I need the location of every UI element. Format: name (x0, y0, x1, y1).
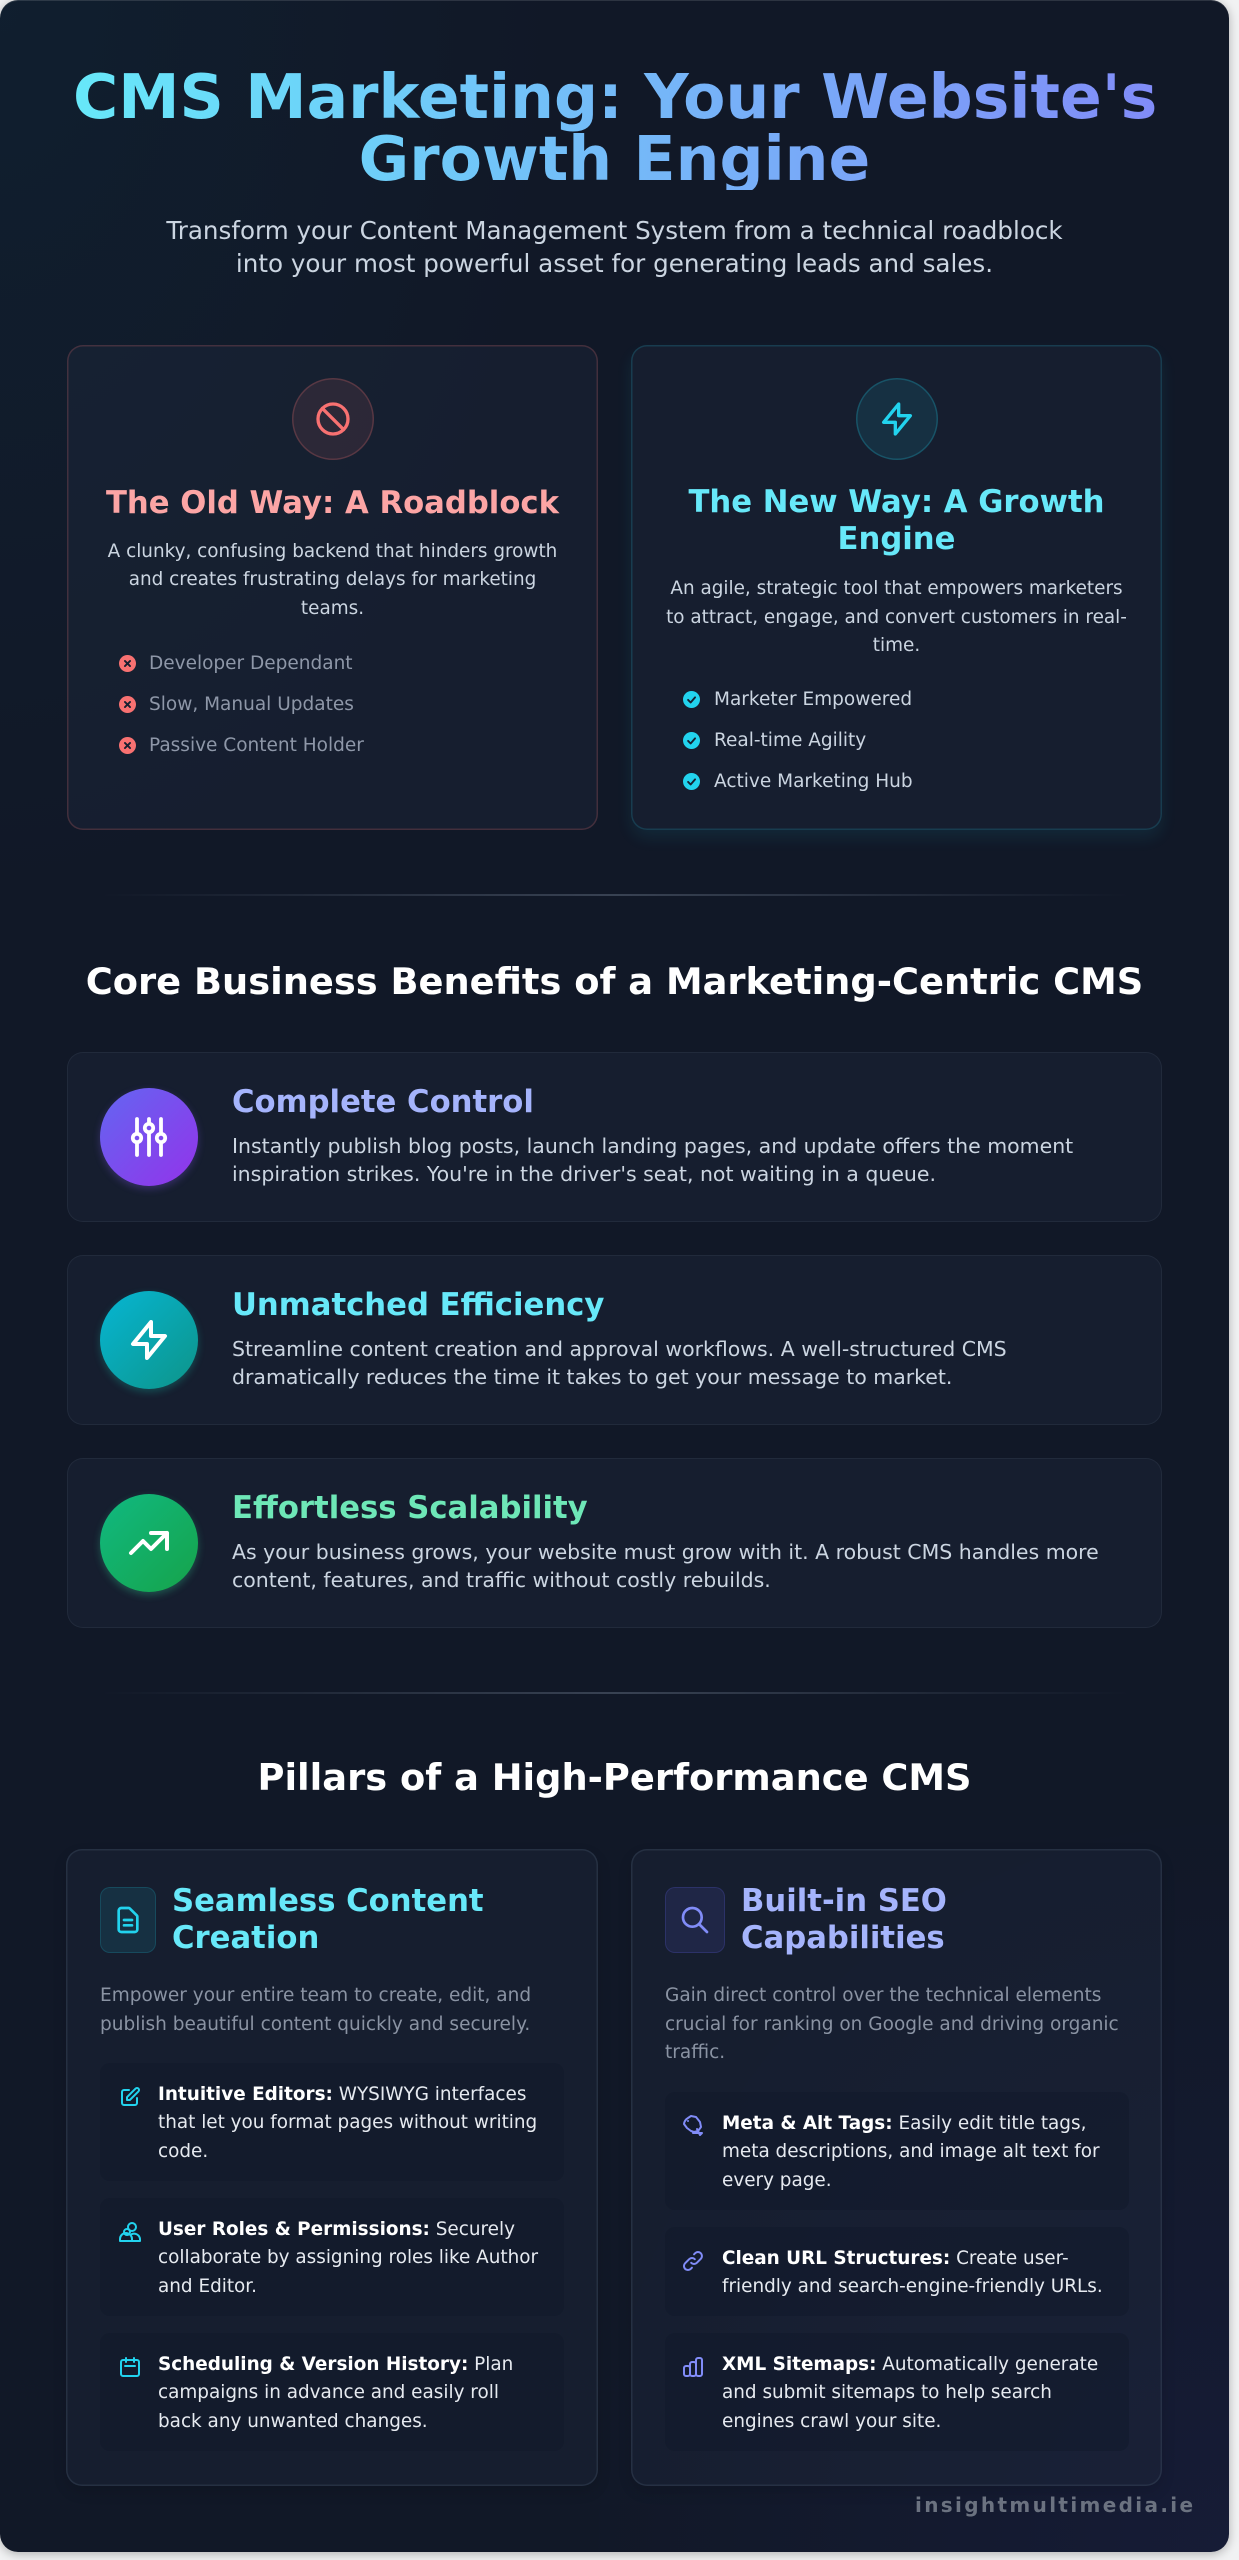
icon: link (683, 2251, 703, 2271)
list item: Slow, Manual Updates (149, 694, 354, 715)
heading: seamless content creation (172, 1884, 484, 1956)
text: effortless scalability: As your business grows, your website must grow with it. A robust CMS handles more (232, 1540, 1099, 1564)
text: seamless description: publish beautiful content quickly and securely. (100, 2014, 530, 2035)
feature: xml sitemaps (665, 2333, 1129, 2451)
heading: built-in seo (741, 1884, 947, 1956)
text: old way description: A clunky, confusing backend that hinders growth (108, 540, 557, 562)
title: CMS Marketing: Your Website's (73, 60, 1157, 132)
feature: scheduling (100, 2333, 564, 2451)
icon: x mark (119, 696, 136, 713)
title: Growth Engine (359, 122, 870, 194)
text: meta and alt tags: every page. (722, 2170, 832, 2191)
panel: the old way (67, 345, 598, 830)
heading: unmatched efficiency: Unmatched Efficiency (232, 1288, 604, 1322)
text: old way description: teams. (301, 598, 364, 619)
panel: unmatched efficiency (67, 1255, 1162, 1425)
list item: Real-time Agility (714, 730, 866, 751)
text: new way description (666, 578, 1127, 656)
text: clean urls (722, 2248, 1103, 2297)
text: unmatched efficiency: dramatically reduces the time it takes to get your message to market. (232, 1365, 952, 1389)
text: new way description: to attract, engage, and convert customers in real- (666, 607, 1127, 628)
text: xml sitemaps: XML Sitemaps: Automatically generate (722, 2354, 1098, 2374)
icon: check mark (683, 691, 700, 708)
text: new way description: time. (873, 635, 920, 656)
text: scheduling: Scheduling & Version History: Plan (158, 2354, 513, 2374)
panel: the new way (631, 345, 1162, 830)
list item: Active Marketing Hub (714, 771, 913, 792)
text: seo description: Gain direct control over the technical elements (665, 1985, 1101, 2006)
text: meta and alt tags: meta descriptions, and image alt text for (722, 2141, 1100, 2162)
text: unmatched efficiency: Streamline content creation and approval workflows. A well-structured CMS (232, 1336, 1007, 1360)
icon: prohibited (292, 378, 374, 460)
icon: bolt (100, 1291, 198, 1389)
text: user roles: collaborate by assigning roles like Author (158, 2247, 538, 2268)
heading: built-in seo: Capabilities (741, 1921, 945, 1956)
text: scheduling: campaigns in advance and easily roll (158, 2382, 499, 2403)
icon: check mark (683, 773, 700, 790)
icon: bar chart (683, 2357, 703, 2377)
text: xml sitemaps: engines crawl your site. (722, 2411, 941, 2432)
text: intuitive editors: Intuitive Editors: WYSIWYG interfaces (158, 2084, 526, 2104)
text: meta and alt tags (722, 2112, 1100, 2191)
list item: Marketer Empowered (714, 689, 912, 710)
feature: intuitive editors (100, 2063, 564, 2181)
text: effortless scalability (232, 1540, 1099, 1592)
feature: clean urls (665, 2227, 1129, 2316)
feature: user roles (100, 2198, 564, 2316)
heading: new way (688, 484, 1104, 556)
icon: x mark (119, 737, 136, 754)
text: effortless scalability: content, features, and traffic without costly rebuilds. (232, 1568, 771, 1592)
text: intuitive editors (158, 2084, 537, 2162)
panel: effortless scalability (67, 1458, 1162, 1628)
watermark: insightmultimedia.ie (915, 2493, 1195, 2517)
heading: core business benefits: Core Business Benefits of a Marketing-Centric CMS (86, 960, 1143, 1002)
text: scheduling: back any unwanted changes. (158, 2411, 428, 2432)
heading: new way: Engine (838, 522, 955, 556)
panel: complete control (67, 1052, 1162, 1222)
text: complete control: inspiration strikes. You're in the driver's seat, not waiting in a queue. (232, 1162, 936, 1186)
text: old way description: and creates frustrating delays for marketing (129, 569, 536, 590)
list: new way benefits (683, 689, 913, 792)
text: xml sitemaps (722, 2354, 1098, 2432)
text: old way description (108, 540, 557, 619)
text: clean urls: Clean URL Structures: Create user- (722, 2248, 1069, 2268)
panel: built-in seo capabilities (631, 1849, 1162, 2486)
heading: built-in seo: Built-in SEO (741, 1884, 947, 1919)
text: seamless description (100, 1985, 531, 2035)
icon: search (665, 1887, 725, 1953)
icon: users (119, 2222, 141, 2242)
list item: Developer Dependant (149, 653, 353, 674)
text: xml sitemaps: and submit sitemaps to help search (722, 2382, 1052, 2403)
icon: tag (683, 2115, 703, 2136)
heading: effortless scalability: Effortless Scalability (232, 1490, 588, 1526)
text: user roles: and Editor. (158, 2276, 257, 2297)
list: old way drawbacks (119, 653, 364, 756)
text: seo description: traffic. (665, 2042, 725, 2063)
icon: x mark (119, 655, 136, 672)
heading: seamless content creation: Seamless Content (172, 1884, 484, 1919)
heading: complete control: Complete Control (232, 1084, 534, 1120)
text: seo description: crucial for ranking on Google and driving organic (665, 2014, 1119, 2035)
text: unmatched efficiency (232, 1336, 1007, 1389)
text: intuitive editors: code. (158, 2141, 208, 2162)
text: seamless description: Empower your entire team to create, edit, and (100, 1985, 531, 2006)
icon: bolt (856, 378, 938, 460)
heading: pillars: Pillars of a High-Performance CMS (257, 1756, 972, 1799)
text: meta and alt tags: Meta & Alt Tags: Easily edit title tags, (722, 2112, 1086, 2134)
text: user roles: User Roles & Permissions: Securely (158, 2218, 515, 2240)
feature: meta and alt tags (665, 2092, 1129, 2210)
icon: check mark (683, 732, 700, 749)
text: seo description (665, 1985, 1119, 2063)
subtitle: Transform your Content Management System from a technical roadblock (166, 216, 1063, 244)
text: user roles (158, 2218, 538, 2297)
text: new way description: An agile, strategic tool that empowers marketers (670, 578, 1123, 599)
text: scheduling (158, 2354, 513, 2432)
icon: sliders (100, 1088, 198, 1186)
list item: Passive Content Holder (149, 735, 364, 756)
icon: document (100, 1887, 156, 1953)
panel: seamless content creation (66, 1849, 598, 2486)
text: complete control (232, 1134, 1073, 1186)
heading: new way: The New Way: A Growth (688, 484, 1104, 520)
title (73, 66, 1156, 190)
icon: edit (121, 2087, 140, 2106)
heading: seamless content creation: Creation (172, 1921, 319, 1956)
text: clean urls: friendly and search-engine-friendly URLs. (722, 2276, 1103, 2297)
icon: trending up (100, 1494, 198, 1592)
text: intuitive editors: that let you format pages without writing (158, 2112, 537, 2133)
icon: calendar (120, 2357, 140, 2377)
subtitle: into your most powerful asset for generating leads and sales. (236, 248, 993, 278)
text: complete control: Instantly publish blog posts, launch landing pages, and update offers the moment (232, 1134, 1073, 1158)
heading: old way: The Old Way: A Roadblock (106, 486, 559, 520)
subtitle (166, 216, 1063, 278)
